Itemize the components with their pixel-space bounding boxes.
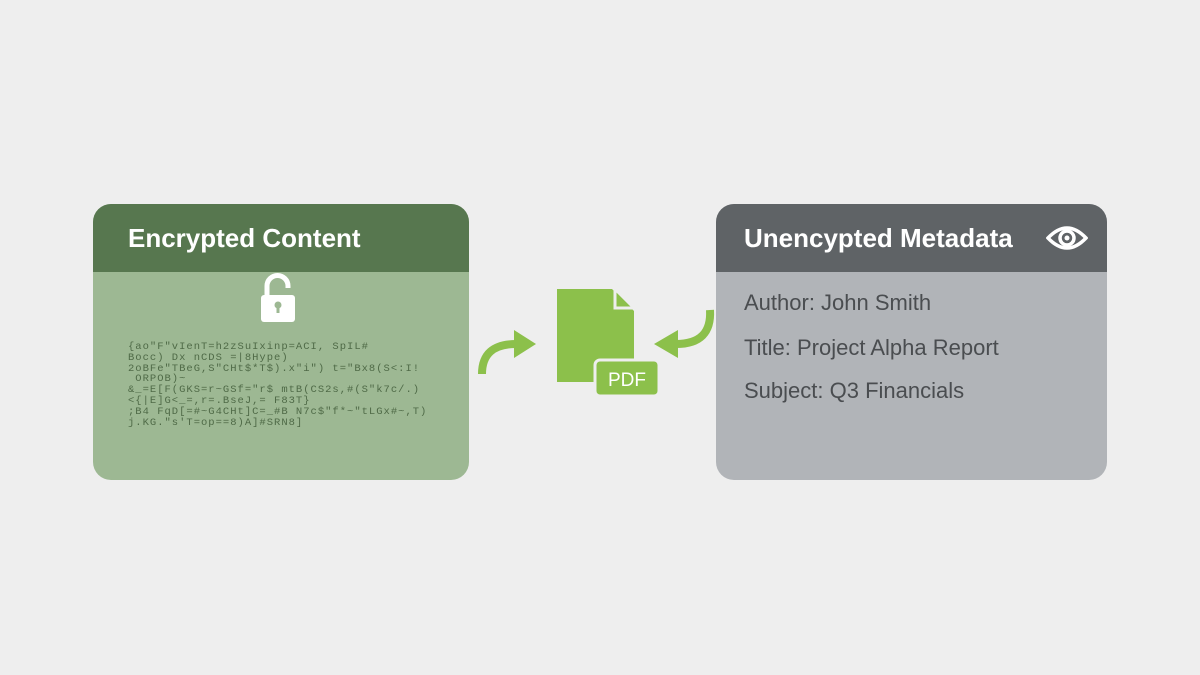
panel: unencrypted metadata <box>716 204 1107 480</box>
icon: PDF document <box>557 289 658 394</box>
heading: encrypted content <box>93 204 469 272</box>
text block: scrambled ciphertext: {ao"F"vIenT=h2zSuIxinp=ACI, SpIL# Bocc) Dx nCDS =|8Hype) 2oBFe"TBeG,S"CHt$*T$).x"i") t="Bx8(S<:I! ORPOB)~ &_=E[F(GKS=r~GSf="r$ mtB(CS2s,#(S"k7c/.) <{|E]G<_=,r=.BseJ,= F83T} ;B4 FqD[=#~G4CHt]C=_#B N7c$"f*~"tLGx#~,T) j.KG."s'T=op==8)A]#SRN8] <box>128 341 427 429</box>
arrow: right into PDF <box>654 310 714 358</box>
text: author: Author: John Smith <box>744 290 931 315</box>
arrow: left into PDF <box>478 330 536 374</box>
icon: open padlock <box>261 273 295 322</box>
text: title: Title: Project Alpha Report <box>744 335 999 360</box>
heading: encrypted content: Encrypted Content <box>128 223 361 253</box>
panel: encrypted content <box>93 204 469 480</box>
icon: PDF document: PDF <box>608 370 646 391</box>
heading: unencrypted metadata: Unencypted Metadata <box>744 223 1013 253</box>
text: subject: Subject: Q3 Financials <box>744 378 964 403</box>
icon: eye <box>1046 226 1088 250</box>
heading: unencrypted metadata <box>716 204 1107 272</box>
